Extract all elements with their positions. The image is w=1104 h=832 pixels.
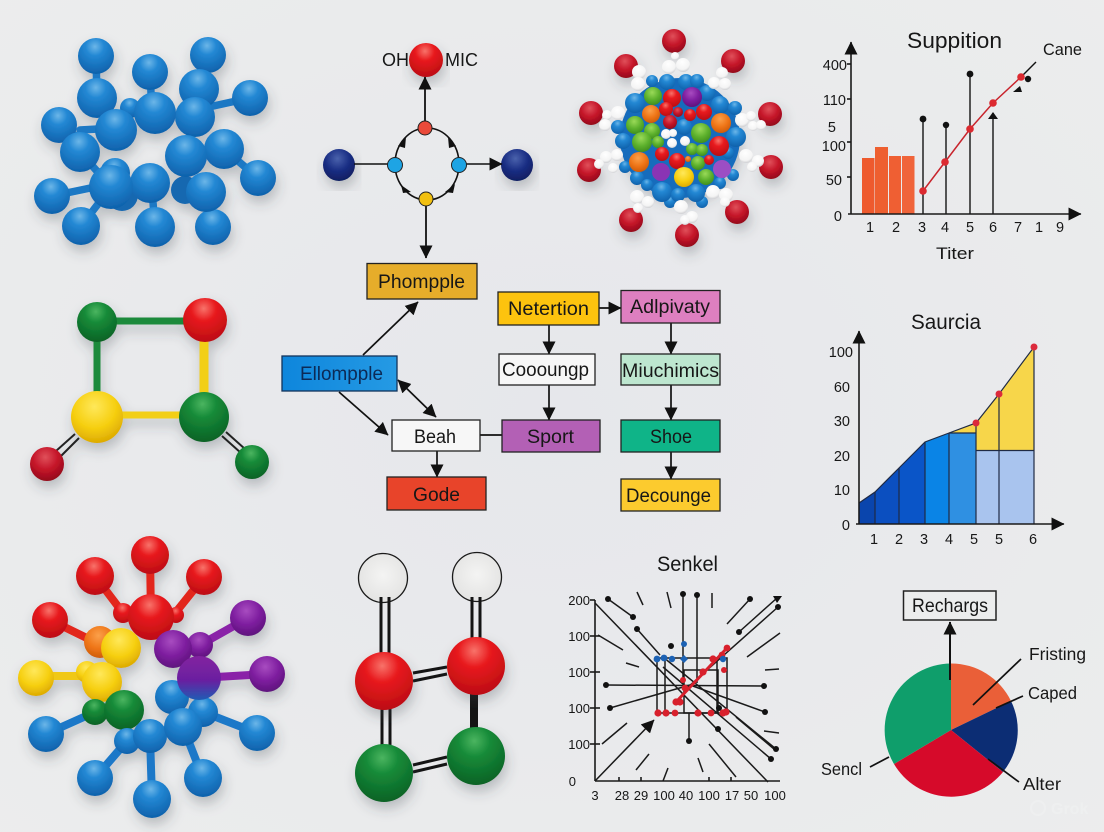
leader lines: [870, 659, 1023, 782]
label: MIC: MIC: [445, 50, 478, 70]
series label: Cane: [1043, 41, 1082, 59]
box: Beah: Beah: [414, 427, 456, 448]
stem tips: [920, 71, 1031, 128]
label: Sencl: Sencl: [821, 759, 862, 779]
box: Shoe: [621, 420, 720, 452]
y-axis labels: [822, 58, 847, 225]
y-axis labels: 10: [834, 483, 850, 499]
blue core: [611, 74, 746, 208]
x-axis labels: 100: [764, 788, 786, 803]
black points: [603, 591, 782, 762]
ball: red top: [409, 43, 443, 77]
radial lines: [595, 592, 780, 782]
label: Caped: Caped: [1028, 683, 1077, 703]
red outer atoms: [577, 29, 783, 247]
box: Coooungp: [499, 354, 595, 385]
y-axis labels: 0: [569, 774, 576, 789]
x-axis labels: 3: [920, 532, 928, 548]
connector: left: [354, 163, 395, 165]
trend line extension: [1021, 62, 1036, 77]
arrow: up to heading: [949, 622, 951, 680]
axes: [590, 600, 780, 781]
ball: navy left: [323, 149, 355, 181]
x-axis labels: 50: [744, 788, 758, 803]
y-axis labels: 100: [568, 701, 590, 716]
box: Decounge: Decounge: [626, 486, 711, 507]
y-axis labels: 100: [568, 737, 590, 752]
x-axis labels: 4: [945, 532, 953, 548]
x-axis labels: 3: [591, 788, 599, 803]
box: Shoe: Shoe: [650, 427, 692, 448]
x-axis labels: 5: [995, 532, 1003, 548]
trend points: [919, 73, 1025, 195]
box: Adlpivaty: [621, 290, 720, 323]
box: Sport: [502, 420, 600, 452]
x-axis labels: 2: [895, 532, 903, 548]
arrow: right: [459, 163, 502, 165]
area outlines: [859, 347, 1034, 524]
arrow: down: [425, 199, 427, 258]
box: Netertion: Netertion: [508, 299, 589, 320]
ball: navy right: [501, 149, 533, 181]
y-axis labels: 200: [568, 593, 590, 608]
coloured atoms: [355, 637, 505, 802]
coloured inner atoms: [626, 87, 731, 187]
molecule: multicolour sunburst: [577, 29, 783, 247]
y-axis labels: 0: [834, 209, 842, 225]
molecule: green red yellow square: [30, 298, 269, 481]
x-axis labels: 3: [918, 220, 926, 236]
box: Phompple: [367, 264, 477, 299]
x-axis labels: 1: [1035, 220, 1043, 236]
heading box: Rechargs: [904, 591, 996, 620]
x-axis labels: [591, 788, 786, 803]
chart: Saurcia: [829, 311, 1064, 548]
box: Miuchimics: [621, 354, 720, 385]
chart: pie Rechargs: [821, 591, 1086, 797]
heading box: Rechargs: Rechargs: [912, 595, 988, 617]
y-axis labels: 60: [834, 380, 850, 396]
blue points: [654, 641, 726, 663]
white atoms: [358, 552, 502, 602]
y-axis labels: 100: [829, 345, 853, 361]
y-axis labels: 0: [842, 518, 850, 534]
x-axis labels: 100: [698, 788, 720, 803]
nodes: [388, 121, 466, 206]
flow arrows: [339, 302, 671, 479]
y-axis labels: 50: [826, 173, 842, 189]
white linker atoms: [594, 52, 766, 225]
pie slices: [885, 663, 1018, 797]
box: Phompple: Phompple: [378, 272, 465, 293]
x-axis labels: 2: [892, 220, 900, 236]
x-axis title: Titer: [936, 245, 975, 263]
box: Beah: [392, 420, 480, 451]
y-axis labels: [568, 593, 590, 789]
stems: [923, 74, 993, 214]
box: Sport: Sport: [527, 427, 575, 448]
y-axis labels: 20: [834, 449, 850, 465]
bonds: [381, 597, 480, 772]
box: Miuchimics: Miuchimics: [622, 361, 719, 382]
red points: [654, 645, 730, 717]
label: Alter: Alter: [1023, 774, 1061, 794]
x-axis labels: [866, 220, 1064, 236]
peak points: [972, 344, 1038, 426]
box: Ellompple: [282, 356, 397, 391]
watermark: Grok: Grok: [1051, 801, 1088, 818]
molecule: blue cluster: [34, 37, 276, 247]
x-axis labels: 1: [866, 220, 874, 236]
x-axis labels: [870, 532, 1037, 548]
y-axis labels: 100: [568, 665, 590, 680]
box: Decounge: [621, 479, 720, 511]
chart title: Suppition: [907, 28, 1002, 53]
diagram: OH MIC ring: [323, 43, 533, 258]
y-axis labels: [829, 345, 853, 534]
chart title: Saurcia: [911, 311, 981, 334]
chart: Suppition: [822, 28, 1082, 263]
x-axis labels: 1: [870, 532, 878, 548]
x-axis labels: 7: [1014, 220, 1022, 236]
label: Fristing: Fristing: [1029, 644, 1086, 664]
x-axis labels: 4: [941, 220, 949, 236]
x-axis labels: 28: [615, 788, 629, 803]
chart: Senkel: [568, 553, 786, 803]
box: Gode: Gode: [413, 485, 460, 506]
x-axis labels: 5: [966, 220, 974, 236]
y-axis labels: 100: [822, 139, 846, 155]
flowchart: [282, 264, 720, 511]
x-axis labels: 6: [989, 220, 997, 236]
box: Ellompple: Ellompple: [300, 364, 383, 385]
box: Netertion: [498, 292, 599, 325]
label: OH: OH: [382, 50, 409, 70]
ring: [395, 128, 459, 200]
y-axis labels: 30: [834, 414, 850, 430]
y-axis labels: 5: [828, 120, 836, 136]
watermark: Grok: [1031, 801, 1088, 818]
x-axis labels: 29: [634, 788, 648, 803]
axes: [856, 331, 1064, 524]
area segments: [859, 347, 1034, 524]
red diagonal: [676, 648, 727, 702]
box: Gode: [387, 477, 486, 510]
x-axis labels: 40: [679, 788, 693, 803]
axes: [847, 42, 1081, 214]
molecule: rainbow: [18, 536, 285, 818]
x-axis labels: 100: [653, 788, 675, 803]
bars: [862, 147, 914, 214]
y-axis labels: 110: [823, 93, 846, 109]
x-axis labels: 5: [970, 532, 978, 548]
x-axis labels: 6: [1029, 532, 1037, 548]
y-axis labels: 400: [823, 58, 847, 74]
x-axis labels: 17: [725, 788, 739, 803]
box: Adlpivaty: Adlpivaty: [630, 297, 711, 318]
molecule: white red green ladder: [355, 552, 505, 802]
box: Coooungp: Coooungp: [502, 360, 589, 381]
chart title: Senkel: [657, 553, 718, 576]
x-axis labels: 9: [1056, 220, 1064, 236]
ring arrows: [398, 137, 456, 193]
arrow: up: [424, 77, 426, 128]
y-axis labels: 100: [568, 629, 590, 644]
trend line: [923, 77, 1021, 191]
